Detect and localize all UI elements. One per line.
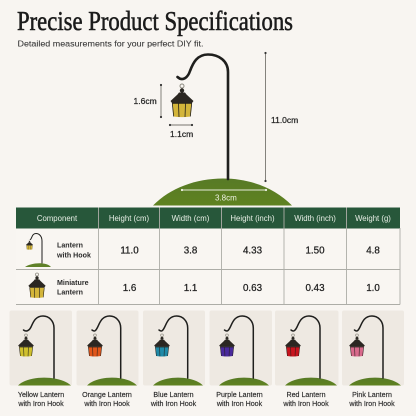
icon: lantern with hook (25, 234, 51, 267)
table body (16, 228, 400, 304)
subtitle: Detailed measurements for your perfect DIY fit. (18, 38, 204, 48)
colour variant: orange (76, 310, 138, 408)
dimension: 3.8cm: 3.8cm (215, 194, 237, 202)
dimension: 11.0cm: 11.0cm (271, 115, 298, 125)
title: Precise Product Specifications (17, 5, 293, 36)
yellow miniature lantern (170, 84, 194, 117)
table header: Weight (g) (355, 214, 391, 223)
row: miniature lantern: Lantern (57, 288, 83, 296)
grass mound (153, 178, 292, 206)
colour variant: blue (143, 310, 205, 408)
dimension: 1.1cm: 1.1cm (170, 129, 193, 139)
colour variant: blue: Blue Lantern (153, 391, 194, 399)
colour variant: pink: with Iron Hook (348, 400, 395, 408)
row: lantern with hook: 11.0 (120, 246, 139, 256)
row: miniature lantern: 1.6 (123, 283, 137, 294)
colour variant: purple: with Iron Hook (216, 400, 263, 408)
table header: Height (cm) (109, 214, 150, 223)
row: miniature lantern: 0.43 (305, 283, 325, 294)
specification table (16, 208, 400, 304)
colour variant: pink: Pink Lantern (352, 391, 392, 399)
icon: miniature lantern (28, 273, 46, 298)
colour variant: purple (210, 310, 272, 408)
main product diagram (134, 52, 298, 206)
table header: Width (cm) (172, 214, 210, 223)
row: miniature lantern: Miniature (57, 279, 89, 287)
dimension: 1.1cm (169, 124, 193, 139)
row: lantern with hook: 1.50 (305, 246, 325, 256)
colour variant: red (275, 310, 338, 408)
colour variant: purple: Purple Lantern (216, 391, 263, 399)
table header: Component (37, 214, 78, 223)
row: lantern with hook: 3.8 (184, 246, 198, 256)
row: lantern with hook (25, 234, 380, 267)
colour variant: yellow (10, 310, 72, 408)
table header: Width (inch) (294, 214, 336, 223)
row: lantern with hook: with Hook (56, 252, 91, 260)
row: miniature lantern (28, 273, 380, 298)
dimension: 3.8cm (181, 189, 267, 202)
row: lantern with hook: Lantern (57, 242, 83, 250)
table header (16, 208, 400, 228)
colour variant: yellow: with Iron Hook (17, 400, 64, 408)
table header: Height (inch) (230, 214, 275, 223)
colour variant: blue: with Iron Hook (150, 400, 197, 408)
row: lantern with hook: 4.33 (243, 246, 263, 256)
dimension: 1.6cm: 1.6cm (134, 96, 157, 106)
row: miniature lantern: 1.1 (184, 283, 197, 294)
row: miniature lantern: 0.63 (243, 283, 263, 294)
colour variant: yellow: Yellow Lantern (18, 391, 64, 399)
dimension: 11.0cm (264, 52, 298, 182)
colour variant: orange: Orange Lantern (82, 391, 132, 399)
row: lantern with hook: 4.8 (366, 246, 380, 256)
iron hook (178, 54, 228, 179)
row: miniature lantern: 1.0 (366, 283, 380, 294)
colour variant: red: Red Lantern (286, 391, 326, 399)
dimension: 1.6cm (134, 84, 162, 118)
colour variant: orange: with Iron Hook (83, 400, 130, 408)
colour variant: pink (342, 310, 404, 408)
colour variant: red: with Iron Hook (282, 400, 329, 408)
